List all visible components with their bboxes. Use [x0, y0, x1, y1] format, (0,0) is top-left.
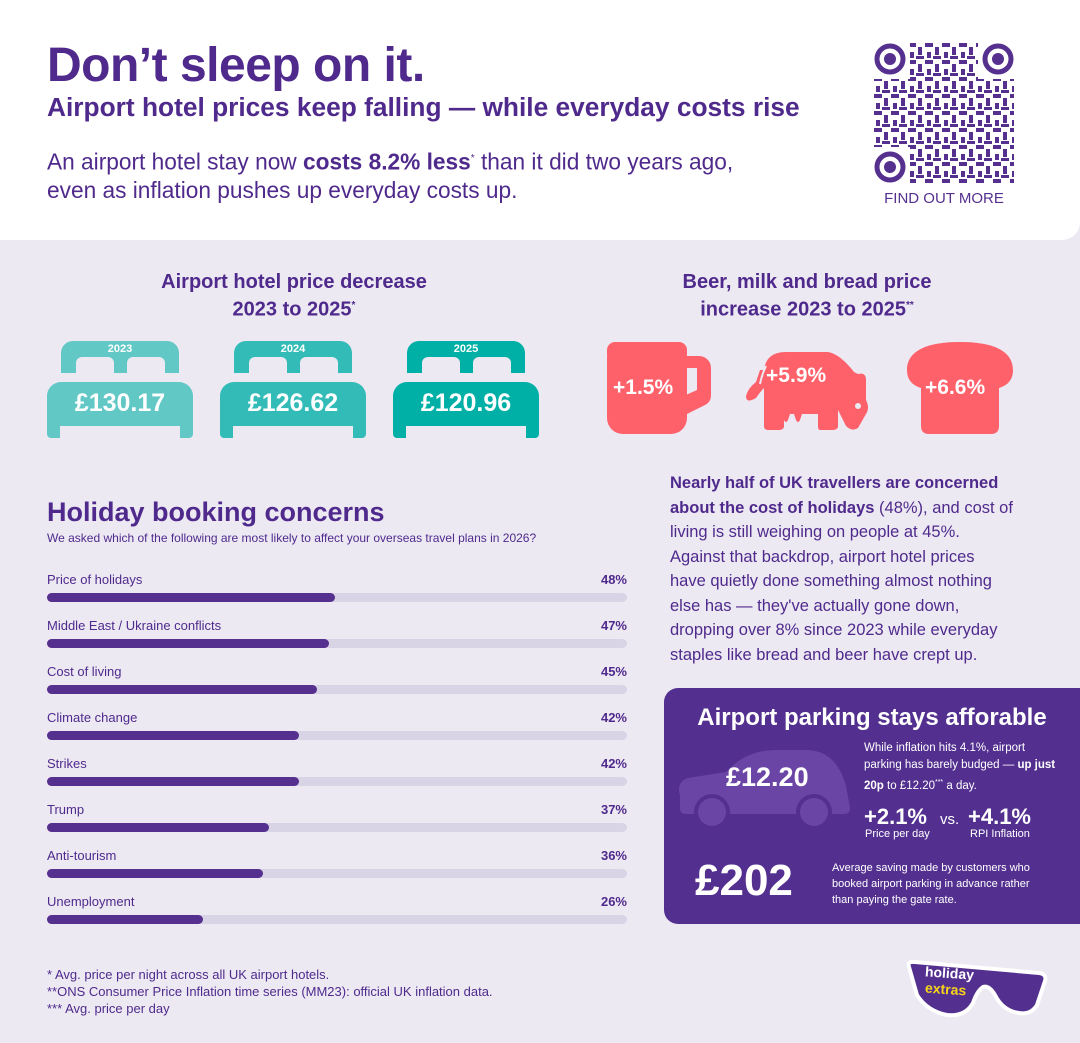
- bed 2025: [393, 341, 539, 438]
- heading: beer milk bread: Beer, milk and bread price: [682, 271, 932, 293]
- bar: anti-tourism: [47, 848, 627, 878]
- logo: holiday extras sunglasses: extras: [924, 980, 967, 998]
- heading: hotel price decrease: Airport hotel price decrease: [161, 271, 427, 293]
- stat comparison: +4.1%: [968, 804, 1031, 829]
- icon: bread: [907, 342, 1013, 434]
- icon: mug: +1.5%: [613, 376, 673, 399]
- bed 2023: 2023: [108, 343, 132, 355]
- bar: unemployment: Unemployment: [47, 894, 134, 909]
- footnotes: **ONS Consumer Price Inflation time series (MM23): official UK inflation data.: [47, 984, 493, 999]
- icon: cow: +5.9%: [766, 364, 826, 387]
- paragraph: concerns summary: Against that backdrop, airport hotel prices: [670, 548, 975, 566]
- stat comparison: RPI Inflation: [970, 828, 1030, 840]
- bed 2023: [47, 341, 193, 438]
- bar: climate change: [47, 710, 627, 740]
- bar: conflicts: 47%: [601, 618, 627, 633]
- intro text: [47, 149, 733, 203]
- bar: strikes: Strikes: [47, 756, 87, 771]
- stat comparison: Price per day: [865, 828, 930, 840]
- bed 2025: 2025: [454, 343, 478, 355]
- title: Don’t sleep on it.: [47, 39, 425, 92]
- paragraph: concerns summary: staples like bread and beer have crept up.: [670, 646, 977, 664]
- bar: price of holidays: [47, 572, 627, 602]
- heading: hotel price decrease: 2023 to 2025*: [233, 299, 355, 321]
- bar: strikes: 42%: [601, 756, 627, 771]
- paragraph: concerns summary: else has — they've actually gone down,: [670, 596, 959, 614]
- bar: cost of living: [47, 664, 627, 694]
- bar: cost of living: Cost of living: [47, 664, 121, 679]
- logo: holiday extras sunglasses: holiday: [925, 963, 975, 983]
- heading: beer milk bread: [682, 271, 932, 321]
- bar: trump: 37%: [601, 802, 627, 817]
- bar: unemployment: 26%: [601, 894, 627, 909]
- icon: car with price: £12.20: [726, 762, 809, 792]
- stat comparison: +2.1%: [864, 804, 927, 829]
- bar: trump: Trump: [47, 802, 84, 817]
- bar: climate change: 42%: [601, 710, 627, 725]
- footnotes: *** Avg. price per day: [47, 1001, 170, 1016]
- subtitle: Airport hotel prices keep falling — while everyday costs rise: [47, 92, 800, 122]
- bed 2024: 2024: [281, 343, 305, 355]
- question text: We asked which of the following are most likely to affect your overseas travel plans in 2026?: [47, 531, 536, 545]
- bar: unemployment: [47, 894, 627, 924]
- footnotes: [47, 967, 493, 1016]
- bar: strikes: [47, 756, 627, 786]
- footnotes: * Avg. price per night across all UK airport hotels.: [47, 967, 329, 982]
- bed 2024: £126.62: [248, 389, 338, 417]
- logo: holiday extras sunglasses: [906, 960, 1048, 1017]
- bar: climate change: Climate change: [47, 710, 137, 725]
- header band: [0, 0, 1080, 240]
- bar: price of holidays: 48%: [601, 572, 627, 587]
- icon: car with price: [679, 750, 850, 826]
- bar: anti-tourism: Anti-tourism: [47, 848, 116, 863]
- QR code: FIND OUT MORE: [884, 190, 1004, 207]
- heading: holiday booking concerns: Holiday booking concerns: [47, 497, 385, 527]
- panel heading: Airport parking stays afforable: [697, 704, 1047, 731]
- panel: airport parking: [664, 688, 1080, 924]
- bar: price of holidays: Price of holidays: [47, 572, 142, 587]
- icon: mug: [607, 342, 711, 434]
- bar: trump: [47, 802, 627, 832]
- heading: hotel price decrease: [161, 271, 427, 321]
- bar: anti-tourism: 36%: [601, 848, 627, 863]
- QR code: [874, 43, 1014, 207]
- bar: conflicts: [47, 618, 627, 648]
- saving text: Average saving made by customers who booked airport parking in advance rather than paying the gate rate.: [832, 862, 1030, 906]
- parking text: While inflation hits 4.1%, airport parking has barely budged — up just 20p to £12.20*** a day.: [864, 742, 1055, 792]
- paragraph: concerns summary: [670, 474, 1013, 664]
- intro text: An airport hotel stay now costs 8.2% less* than it did two years ago,: [47, 149, 733, 175]
- stat comparison: vs.: [940, 811, 959, 828]
- icon: cow: [746, 352, 868, 430]
- paragraph: concerns summary: Nearly half of UK travellers are concerned: [670, 474, 998, 492]
- bed 2025: £120.96: [421, 389, 511, 417]
- bed 2024: [220, 341, 366, 438]
- bar: cost of living: 45%: [601, 664, 627, 679]
- big saving stat: £202: [695, 856, 793, 905]
- paragraph: concerns summary: dropping over 8% since 2023 while everyday: [670, 621, 997, 639]
- paragraph: concerns summary: have quietly done something almost nothing: [670, 572, 992, 590]
- bar: conflicts: Middle East / Ukraine conflicts: [47, 618, 221, 633]
- paragraph: concerns summary: living is still weighing on people at 45%.: [670, 523, 960, 541]
- intro text: even as inflation pushes up everyday costs up.: [47, 177, 517, 203]
- paragraph: concerns summary: about the cost of holidays (48%), and cost of: [670, 498, 1013, 516]
- stat comparison: [864, 804, 1031, 840]
- icon: bread: +6.6%: [925, 376, 985, 399]
- heading: beer milk bread: increase 2023 to 2025**: [700, 299, 914, 321]
- bed 2023: £130.17: [75, 389, 165, 417]
- bar chart: concerns: [47, 572, 627, 924]
